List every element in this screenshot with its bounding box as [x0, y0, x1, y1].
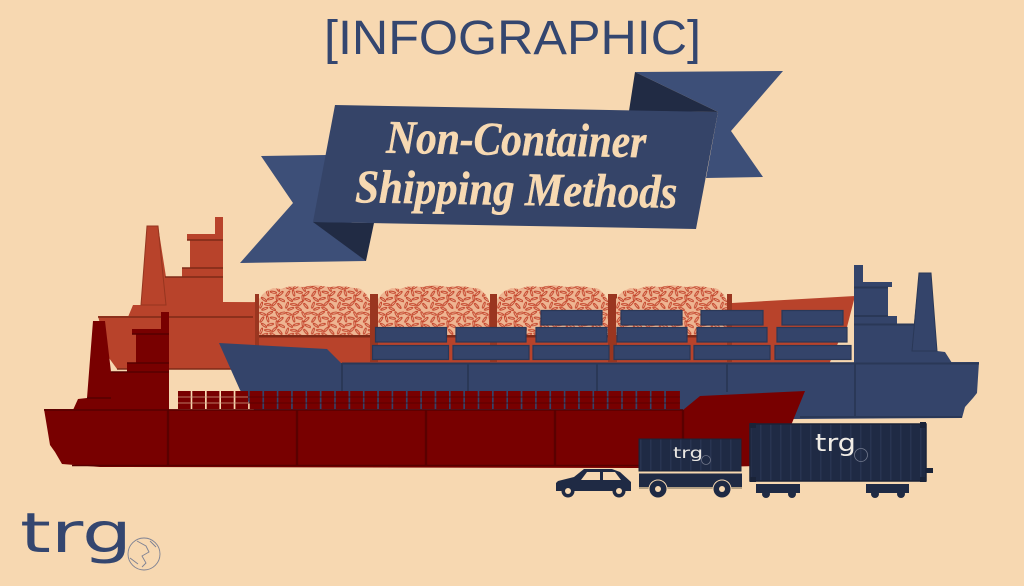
truck container logo: trg	[673, 444, 703, 462]
truck container	[639, 439, 741, 471]
logo: trg: trg	[20, 501, 132, 565]
icon: truck with container	[639, 439, 742, 498]
orange funnel	[141, 226, 166, 305]
ribbon right tail	[635, 71, 783, 178]
ribbon right fold	[629, 72, 718, 112]
red hull lines	[168, 410, 683, 466]
icon: large container on bogies	[750, 422, 933, 498]
blue superstructure	[854, 265, 952, 363]
icon: car	[556, 469, 631, 498]
large container body	[750, 424, 926, 481]
ribbon left fold	[313, 222, 374, 261]
ribbon left tail	[240, 155, 366, 263]
icon: globe	[128, 538, 160, 570]
large container logo: trg	[815, 429, 856, 457]
red superstructure	[73, 312, 169, 410]
blue hull lines	[342, 288, 979, 417]
banner heading: Shipping Methods	[355, 161, 678, 219]
ribbon banner	[240, 71, 783, 263]
orange superstructure	[128, 217, 223, 317]
blue funnel outline	[912, 273, 937, 351]
cargo hold pillars	[255, 294, 732, 362]
title: [INFOGRAPHIC]	[324, 12, 701, 65]
deck cargo rows	[178, 391, 680, 409]
bogies	[756, 484, 909, 493]
orange deck lines	[98, 240, 253, 369]
bulk carrier ship (orange)	[98, 217, 855, 372]
container ship (blue)	[219, 265, 979, 419]
red hull	[44, 391, 805, 468]
orange hull	[98, 296, 855, 372]
logo: trg	[20, 501, 160, 570]
truck chassis	[639, 474, 742, 488]
stacked containers	[372, 310, 851, 360]
banner heading: Non-Container	[385, 112, 647, 168]
ribbon main panel	[313, 105, 718, 229]
bulk grain cargo	[259, 285, 727, 338]
banner heading	[355, 112, 678, 219]
blue hull	[219, 343, 979, 419]
container ship (dark red)	[44, 312, 805, 468]
